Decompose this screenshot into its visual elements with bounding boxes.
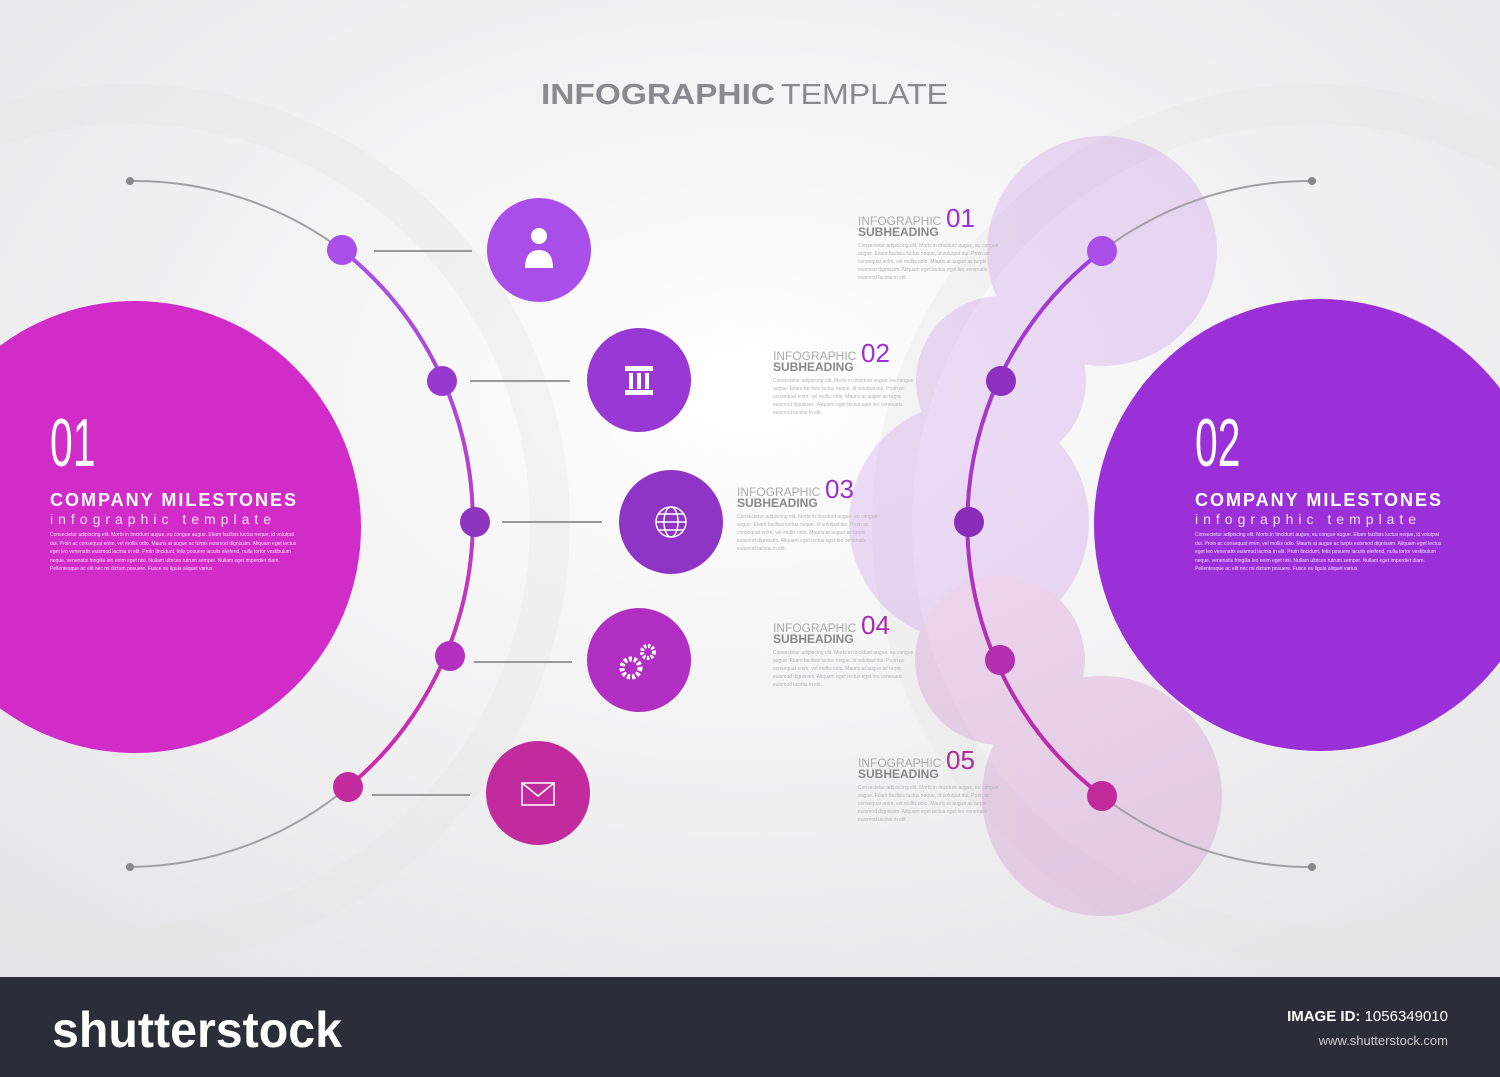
right translucent circles — [849, 136, 1222, 916]
icon: column — [587, 328, 691, 432]
right circle text: COMPANY MILESTONES — [1195, 490, 1443, 510]
right big circle — [1094, 299, 1500, 751]
icon: user — [487, 198, 591, 302]
subheading 05: Consectetur adipiscing elit. Morbi in tincidunt augue, eu congue augue. Etiam facilisis luctus neque, id volutpat dui. Proin ac consequat enim, vel mollis odio. Mauris at augue ac turpis euismod dignissim. Aliquam eget lectus eget leo venenatis euismod lacinia in elit. — [858, 785, 998, 823]
subheading 02: SUBHEADING — [773, 360, 854, 374]
right circle text: Consectetur adipiscing elit. Morbi in tincidunt augue, eu congue augue. Etiam facilisis luctus neque, id volutpat dui. Proin ac consequat enim, vel mollis odio. Mauris at augue ac turpis euismod dignissim. Aliquam eget lectus eget leo venenatis euismod lacinia in elit. Proin tincidunt, felis posuere iaculis eleifend, nulla tortor vestibulum neque, venenatis fringilla leo enim eget nisi. Nullam ultrices rutrum semper. Nullam eget imperdiet diam. Pellentesque ac elit nec mi dictum posuere. Fusce eu ligula aliquet varius. — [1195, 532, 1441, 572]
left arc timeline — [126, 177, 602, 871]
subheading 03 — [737, 474, 878, 552]
subheading 01: 01 — [946, 203, 975, 233]
icon: gears — [587, 608, 691, 712]
left big circle — [0, 301, 361, 753]
subheading 05: SUBHEADING — [858, 767, 939, 781]
right circle text — [1195, 405, 1443, 572]
footer bar: IMAGE ID: 1056349010 — [1287, 1008, 1448, 1025]
left circle text: 01 — [50, 405, 95, 481]
left circle text — [50, 405, 298, 572]
subheading 01: SUBHEADING — [858, 225, 939, 239]
subheading 02: Consectetur adipiscing elit. Morbi in tincidunt augue, eu congue augue. Etiam facilisis luctus neque, id volutpat dui. Proin ac consequat enim, vel mollis odio. Mauris at augue ac turpis euismod dignissim. Aliquam eget lectus eget leo venenatis euismod lacinia in elit. — [773, 378, 913, 416]
subheading 04: SUBHEADING — [773, 632, 854, 646]
subheading 05 — [858, 745, 998, 823]
title: TEMPLATE — [781, 79, 948, 111]
subheading 04: Consectetur adipiscing elit. Morbi in tincidunt augue, eu congue augue. Etiam facilisis luctus neque, id volutpat dui. Proin ac consequat enim, vel mollis odio. Mauris at augue ac turpis euismod dignissim. Aliquam eget lectus eget leo venenatis euismod lacinia in elit. — [773, 650, 913, 688]
subheading 02: INFOGRAPHIC — [773, 349, 856, 363]
footer bar: shutterstock — [52, 1002, 342, 1058]
right circle text: 02 — [1195, 405, 1240, 481]
title: INFOGRAPHIC — [541, 79, 775, 111]
subheading 05: 05 — [946, 745, 975, 775]
subheading 01 — [858, 203, 998, 281]
subheading 03: INFOGRAPHIC — [737, 485, 820, 499]
left circle text: COMPANY MILESTONES — [50, 490, 298, 510]
subheading 01: INFOGRAPHIC — [858, 214, 941, 228]
footer bar: www.shutterstock.com — [1318, 1033, 1448, 1048]
title — [541, 79, 948, 111]
subheading 05: INFOGRAPHIC — [858, 756, 941, 770]
subheading 02 — [773, 338, 914, 416]
subheading 04: 04 — [861, 610, 890, 640]
left circle text: infographic template — [50, 511, 276, 527]
subheading 04 — [773, 610, 914, 688]
subheading 03: 03 — [825, 474, 854, 504]
right arc timeline — [954, 177, 1316, 871]
right circle text: infographic template — [1195, 511, 1421, 527]
subheading 01: Consectetur adipiscing elit. Morbi in tincidunt augue, eu congue augue. Etiam facilisis luctus neque, id volutpat dui. Proin ac consequat enim, vel mollis odio. Mauris at augue ac turpis euismod dignissim. Aliquam eget lectus eget leo venenatis euismod lacinia in elit. — [858, 243, 998, 281]
subheading 03: SUBHEADING — [737, 496, 818, 510]
footer bar — [0, 977, 1500, 1077]
icon: globe — [619, 470, 723, 574]
subheading 02: 02 — [861, 338, 890, 368]
icon: mail — [486, 741, 590, 845]
left circle text: Consectetur adipiscing elit. Morbi in tincidunt augue, eu congue augue. Etiam facilisis luctus neque, id volutpat dui. Proin ac consequat enim, vel mollis odio. Mauris at augue ac turpis euismod dignissim. Aliquam eget lectus eget leo venenatis euismod lacinia in elit. Proin tincidunt, felis posuere iaculis eleifend, nulla tortor vestibulum neque, venenatis fringilla leo enim eget nisi. Nullam ultrices rutrum semper. Nullam eget imperdiet diam. Pellentesque ac elit nec mi dictum posuere. Fusce eu ligula aliquet varius. — [50, 532, 296, 572]
subheading 03: Consectetur adipiscing elit. Morbi in tincidunt augue, eu congue augue. Etiam facilisis luctus neque, id volutpat dui. Proin ac consequat enim, vel mollis odio. Mauris at augue ac turpis euismod dignissim. Aliquam eget lectus eget leo venenatis euismod lacinia in elit. — [737, 514, 877, 552]
subheading 04: INFOGRAPHIC — [773, 621, 856, 635]
